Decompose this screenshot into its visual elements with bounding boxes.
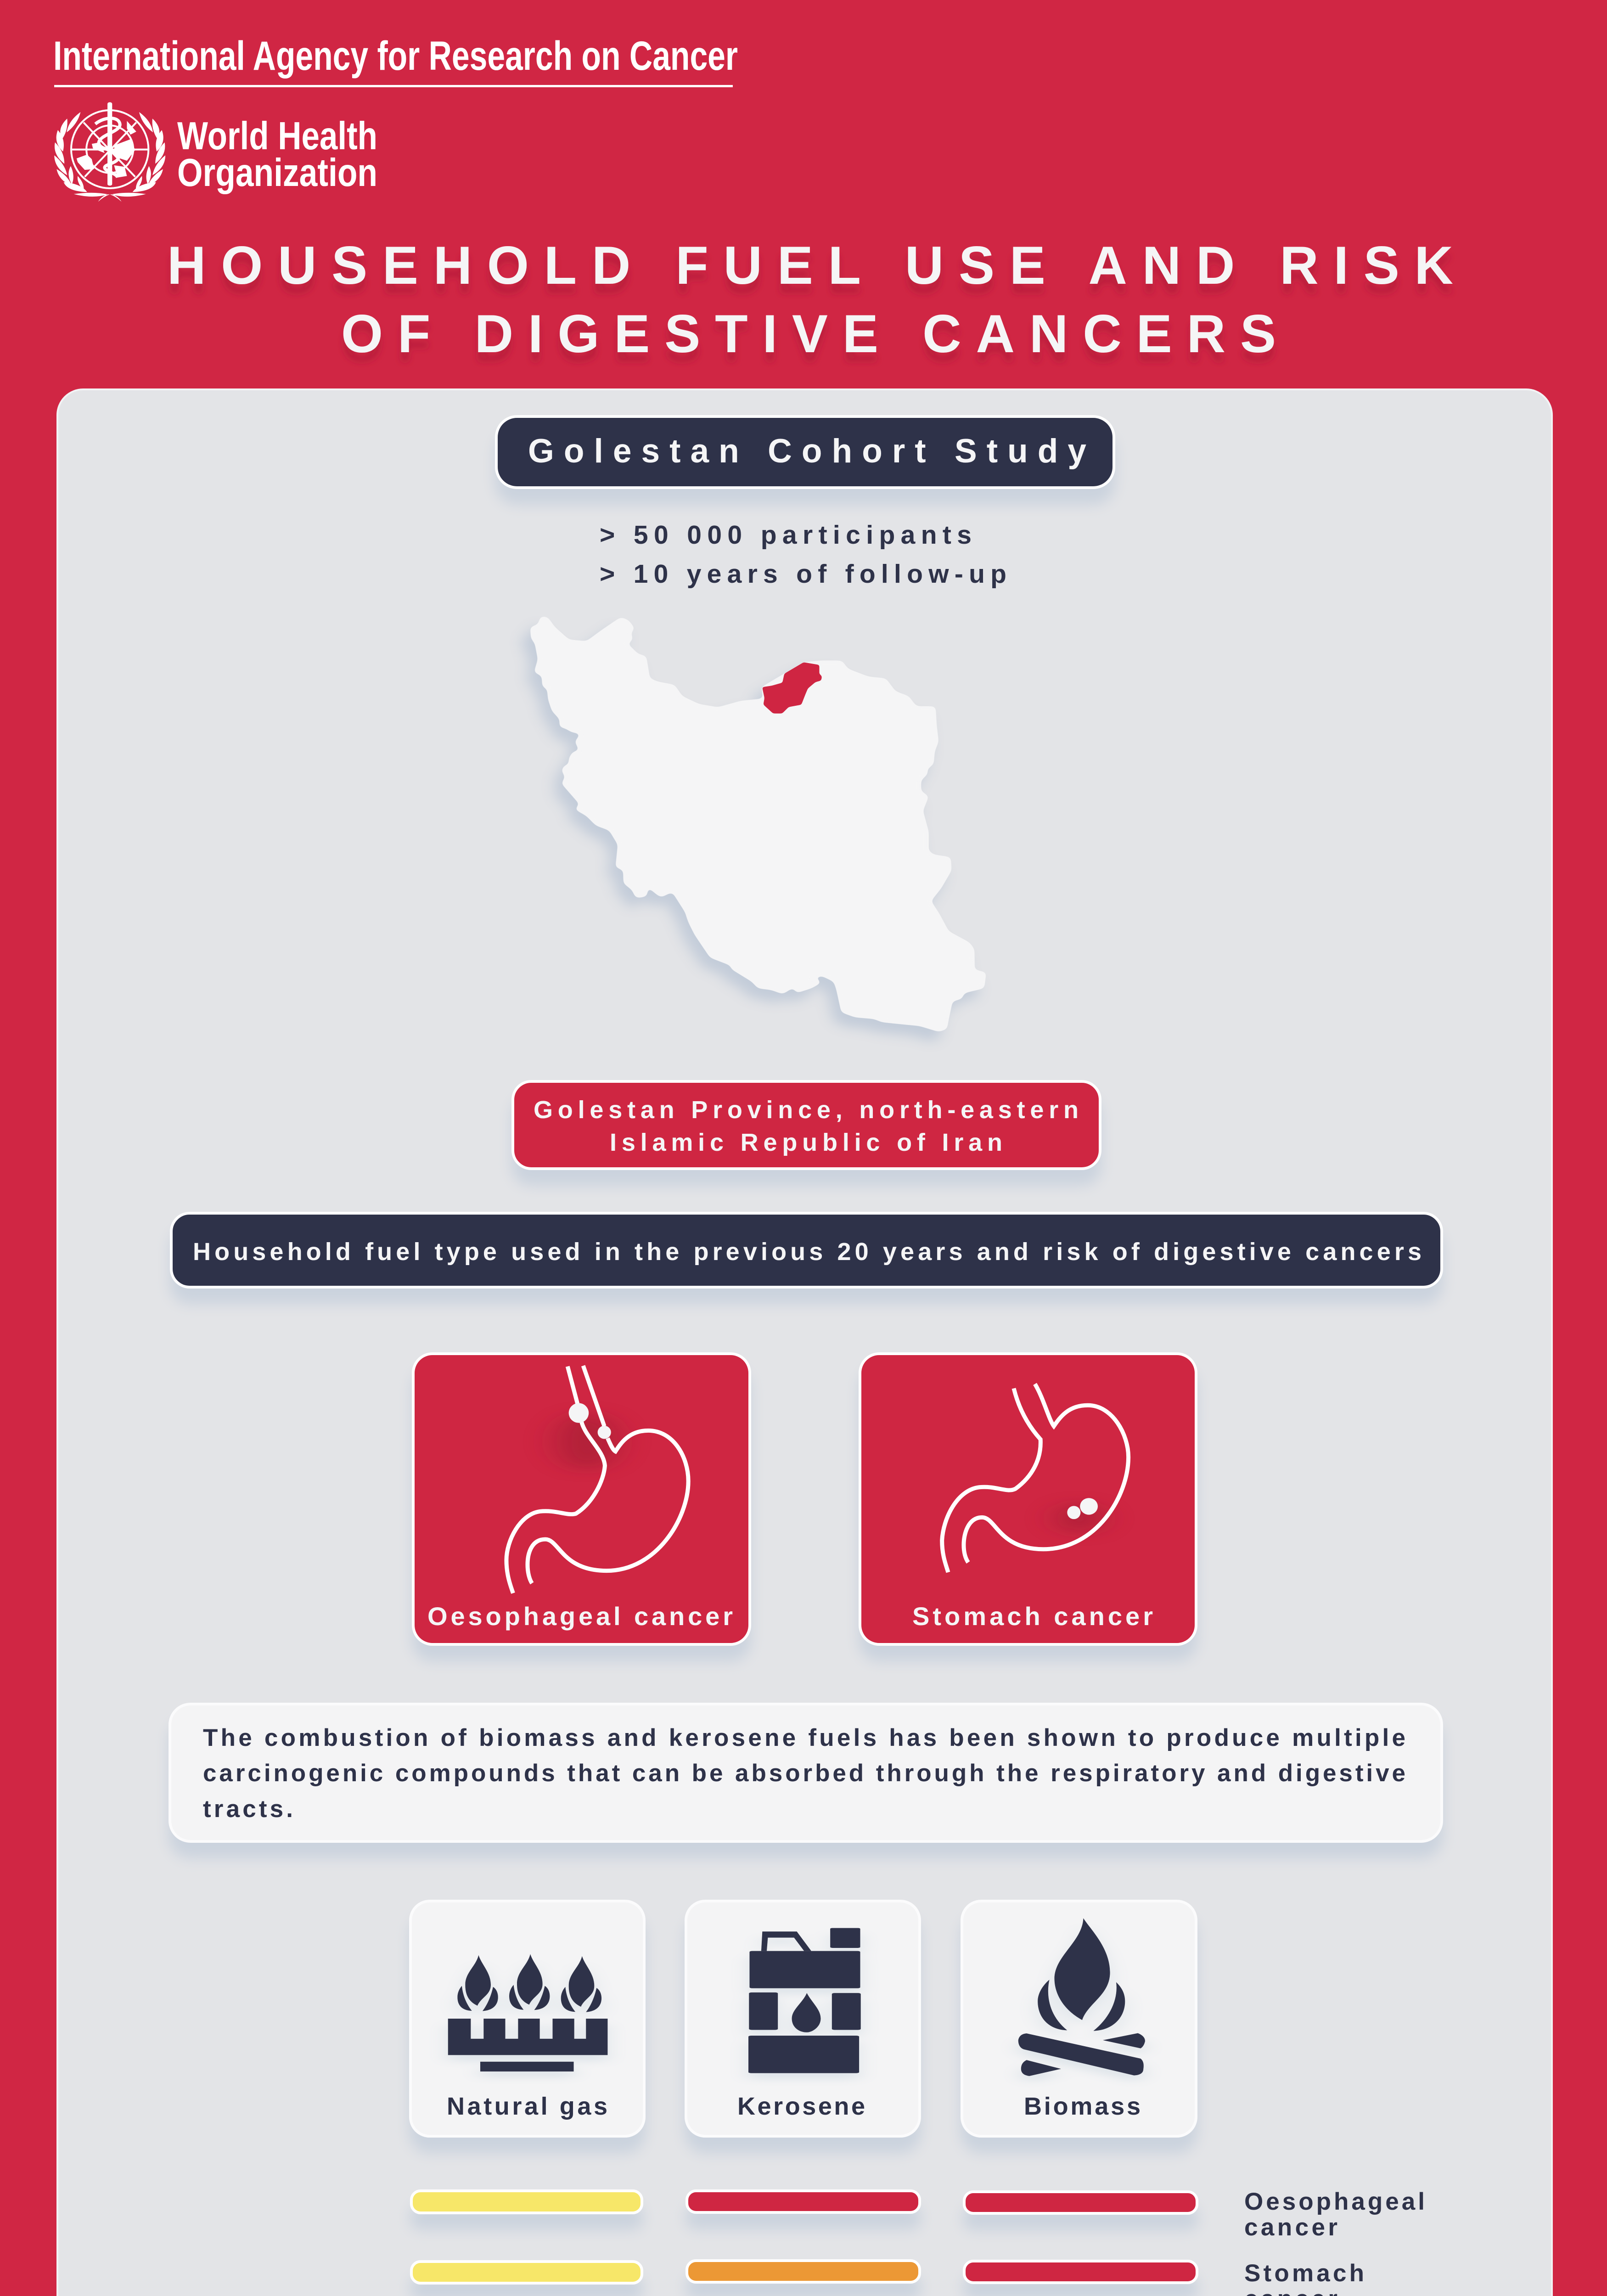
logo: World Health Organization: Organization <box>177 151 377 195</box>
panel: natural gas: Natural gas <box>447 2093 607 2120</box>
icon: stomach with gastric tumours <box>942 1384 1129 1572</box>
chart: risk bars by fuel type <box>411 2188 1425 2296</box>
text block: combustion: carcinogenic compounds that can be absorbed through the respiratory and digestive <box>203 1760 1405 1787</box>
row label: oesophageal cancer: Oesophageal <box>1244 2188 1425 2215</box>
panel: kerosene: Kerosene <box>737 2093 865 2120</box>
logo: International Agency for Research on Cancer: International Agency for Research on Cancer <box>53 33 738 79</box>
text block: combustion: The combustion of biomass and kerosene fuels has been shown to produce multiple <box>203 1724 1405 1751</box>
map: Islamic Republic of Iran with Golestan highlighted <box>531 617 986 1031</box>
bar: kerosene, oesophageal <box>687 2191 920 2212</box>
panel: kerosene <box>686 1901 920 2136</box>
title: HOUSEHOLD FUEL USE AND RISK <box>167 235 1453 295</box>
bar: biomass, oesophageal <box>964 2192 1197 2213</box>
logo: International Agency for Research on Cancer <box>53 33 738 87</box>
text block: combustion: tracts. <box>203 1795 293 1823</box>
bar: kerosene, stomach <box>687 2261 920 2282</box>
panel: biomass <box>962 1901 1196 2136</box>
text: study facts <box>600 520 1006 589</box>
icon: stomach with oesophageal tumours <box>506 1366 688 1593</box>
heading: Golestan Cohort Study <box>496 416 1114 488</box>
panel: oesophageal cancer <box>413 1354 750 1644</box>
label: Golestan Province: Golestan Province, north-eastern <box>534 1096 1079 1124</box>
panel: biomass: Biomass <box>1024 2093 1141 2120</box>
bar: natural gas, stomach <box>411 2262 642 2283</box>
heading: Golestan Cohort Study: Golestan Cohort Study <box>528 433 1086 470</box>
map outline <box>531 617 986 1031</box>
label: Golestan Province <box>513 1081 1100 1169</box>
panel: natural gas <box>410 1901 644 2136</box>
heading: household fuel type: Household fuel type used in the previous 20 years and risk of digestive cancers <box>193 1238 1422 1266</box>
text block: combustion <box>170 1704 1442 1841</box>
heading: household fuel type <box>171 1213 1442 1287</box>
title <box>167 235 1453 364</box>
map: Golestan Province <box>763 663 821 713</box>
icon: WHO emblem <box>54 102 165 202</box>
panel: stomach cancer <box>860 1354 1196 1644</box>
bar: natural gas, oesophageal <box>411 2191 642 2213</box>
row label: oesophageal cancer <box>1244 2188 1425 2241</box>
logo: World Health Organization: World Health <box>177 114 377 158</box>
text: study facts: > 50 000 participants <box>600 520 972 550</box>
icon: gas burner <box>448 1954 607 2071</box>
text: study facts: > 10 years of follow-up <box>600 559 1006 589</box>
title: OF DIGESTIVE CANCERS <box>341 304 1276 364</box>
icon: fuel canister <box>748 1928 861 2073</box>
icon: campfire <box>1018 1918 1145 2076</box>
bar: biomass, stomach <box>964 2261 1197 2283</box>
panel: stomach cancer: Stomach cancer <box>912 1602 1153 1631</box>
panel: oesophageal cancer: Oesophageal cancer <box>427 1602 733 1631</box>
logo: World Health Organization <box>54 102 377 202</box>
label: Golestan Province: Islamic Republic of Iran <box>610 1129 1002 1156</box>
panel: main content <box>57 389 1552 2296</box>
row label: stomach cancer: Stomach <box>1244 2260 1364 2287</box>
row label: oesophageal cancer: cancer <box>1244 2214 1337 2241</box>
